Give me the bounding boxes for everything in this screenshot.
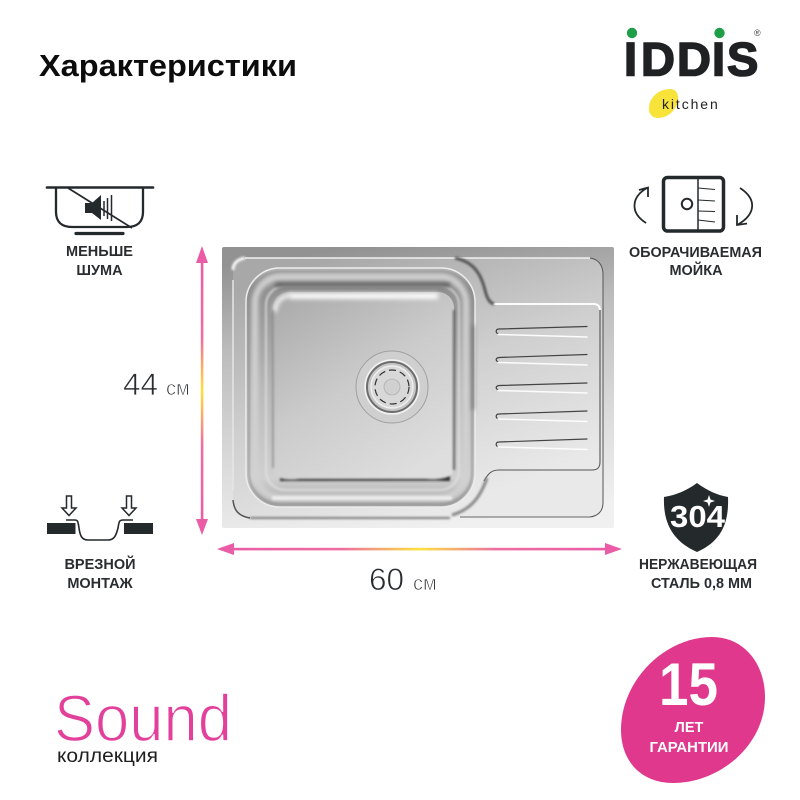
- icon: 304 steel shield: [639, 483, 757, 592]
- label: flush mount: ВРЕЗНОЙ: [64, 557, 136, 573]
- logo: IDDIS kitchen: kitchen: [662, 96, 720, 112]
- sink plate: [222, 247, 614, 528]
- icon: 304 steel shield: СТАЛЬ 0,8 ММ: [651, 576, 752, 592]
- width arrow: [217, 543, 622, 555]
- collection name: Sound: [54, 681, 232, 755]
- deck rim: [233, 258, 603, 517]
- logo: IDDIS kitchen: [624, 28, 761, 118]
- icon: 304 steel shield: 304: [670, 499, 726, 534]
- bowl floor: [273, 292, 454, 482]
- drainboard grooves: [496, 326, 587, 450]
- icon: flush mount: [47, 496, 153, 592]
- warranty badge: 15: [659, 651, 718, 718]
- sink photo: [222, 247, 614, 528]
- label: less noise: МЕНЬШЕ: [66, 244, 133, 260]
- height arrow: [196, 246, 208, 535]
- warranty badge: ГАРАНТИИ: [650, 740, 728, 756]
- drain: [356, 351, 428, 423]
- width label: 60 см: [369, 561, 437, 597]
- label: flush mount: МОНТАЖ: [67, 576, 134, 592]
- label: reversible sink: ОБОРАЧИВАЕМАЯ: [629, 245, 762, 261]
- title: Характеристики: [39, 48, 297, 83]
- logo: IDDIS kitchen: ®: [754, 28, 761, 38]
- logo: IDDIS kitchen: IDDIS: [624, 32, 758, 86]
- collection name: коллекция: [57, 745, 158, 767]
- warranty badge: [621, 637, 765, 783]
- icon: reversible sink: [629, 178, 762, 279]
- height label: 44 см: [123, 366, 190, 402]
- icon: reversible sink: МОЙКА: [669, 261, 723, 279]
- icon: less noise: [47, 188, 153, 279]
- label: steel: НЕРЖАВЕЮЩАЯ: [639, 557, 757, 573]
- bowl: [246, 268, 475, 507]
- label: less noise: ШУМА: [76, 263, 123, 279]
- drainboard: [493, 304, 600, 310]
- warranty badge: ЛЕТ: [675, 720, 703, 736]
